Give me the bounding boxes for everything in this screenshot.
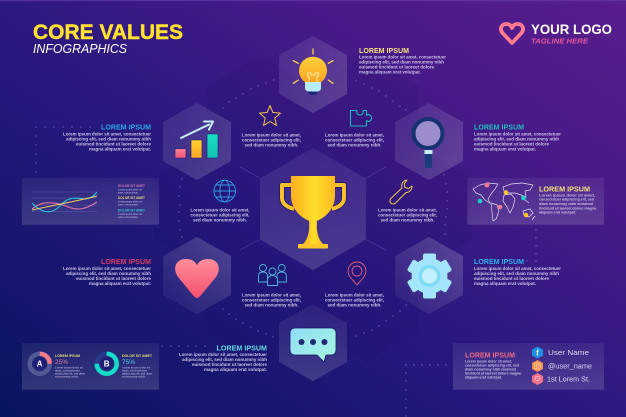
panel: line chart: amet, consectetuer [118,190,138,194]
feature: puzzle: sed diam nonummy nibh. [328,143,382,148]
feature: star: consectetuer adipiscing elit, [242,138,301,143]
icon: map pin [348,262,366,285]
icon: star [260,106,280,125]
feature: star: Lorem ipsum dolor sit amet, [242,133,301,138]
feature: location [325,262,384,308]
text block: left upper: Lorem ipsum dolor sit amet, consectetuer [63,132,151,136]
feature: team [242,264,301,308]
panel: world map [467,178,604,225]
panel: line chart: Lorem ipsum dolor sit [118,212,142,216]
text block: left lower [63,259,151,286]
panel: world map: diam nonummy nibh euismod [539,202,593,206]
feature: location: Lorem ipsum dolor sit amet, [325,293,384,298]
panel: line chart: amet, consectetuer [118,202,138,206]
panel: donut charts: adipiscing elit, sed diam [122,372,153,376]
feature: globe: Lorem ipsum dolor sit amet, [190,208,250,212]
panel: trophy hexagon [260,148,366,270]
feature: team: consectetuer adipiscing elit, [242,298,301,303]
text block: right upper: adipiscing elit, sed diam nonummy nibh [474,136,559,142]
panel: donut charts: LOREM IPSUM [55,354,80,358]
feature: globe: consectetuer adipiscing elit, [190,212,250,218]
feature: wrench [378,180,437,222]
text block: top: magna aliquam erat volutpat. [359,70,421,74]
panel: donut charts: Lorem ipsum dolor sit [55,366,83,370]
panel: line chart [22,178,159,225]
panel: donut charts: amet, consectetuer [122,368,147,372]
panel: gear hexagon [395,237,463,314]
panel: donut charts: nonummy nibh. [122,374,146,378]
panel: heart hexagon [163,237,231,314]
panel: line chart: DOLOR SIT AMET [118,184,145,188]
feature: puzzle: consectetuer adipiscing elit, [325,138,384,143]
icon: light bulb [293,49,333,95]
text block: right upper: Lorem ipsum dolor sit amet, consectetuer [474,132,561,136]
panel: donut charts: 25% [55,359,68,366]
icon: location [532,373,543,385]
title [33,21,183,56]
panel: contact: tincidunt ut laoreet dolore magna [465,372,521,376]
panel: contact: LOREM IPSUM [465,352,515,360]
panel: world map: tincidunt ut laoreet dolore magna [539,206,596,210]
panel: world map: Lorem ipsum dolor sit amet, [539,194,595,198]
feature: wrench: sed diam nonummy nibh. [380,218,434,222]
text block: top [359,48,446,74]
panel: magnifier hexagon [395,103,463,180]
text block: left upper: euismod tincidunt ut laoreet dolore [76,142,151,146]
text block: right lower: LOREM IPSUM [474,259,524,266]
panel: bulb hexagon [279,36,347,113]
title: CORE VALUES [33,21,183,44]
panel: line chart: Lorem ipsum dolor sit [118,200,142,204]
feature: puzzle [325,110,384,148]
icon: logo heart [501,24,523,43]
text block: left upper: adipiscing elit, sed diam nonummy nibh [66,136,151,142]
feature: puzzle: Lorem ipsum dolor sit amet, [325,133,384,138]
icon: wrench [390,180,412,204]
text block: bottom: euismod tincidunt ut laoreet dolore [192,362,267,367]
panel: donut charts [22,343,159,390]
feature: wrench: Lorem ipsum dolor sit amet, [378,208,437,212]
text block: left upper: magna aliquam erat volutpat. [89,146,151,152]
icon: chat bubble [290,328,336,362]
logo: TAGLINE HERE [531,36,589,46]
text block: bottom: adipiscing elit, sed diam nonummy nibh [182,357,267,362]
text block: top: euismod tincidunt ut laoreet dolore [359,64,434,70]
text block: bottom: LOREM IPSUM [216,345,267,352]
panel: world map: consectetuer adipiscing elit, sed [539,198,594,202]
icon: heart [175,259,219,298]
logo: YOUR LOGO [531,21,612,37]
feature: star: sed diam nonummy nibh. [244,143,298,148]
icon: bar chart with arrow [175,122,218,158]
text block: left upper: LOREM IPSUM [101,125,151,132]
chart: donut B 75%: B [104,360,110,368]
panel: donut charts: amet, consectetuer [55,368,80,372]
text block: right upper: euismod tincidunt ut laoreet dolore [474,142,549,146]
icon: world map outline [473,183,535,221]
honeycomb backing cells [154,56,472,362]
icon: gear [407,254,452,298]
panel: contact: 1st Lorem St. [547,374,590,384]
panel: chat hexagon [279,304,347,381]
text block: right upper [474,125,561,152]
text block: bottom: magna aliquam erat volutpat. [204,367,267,372]
text block: right upper: magna aliquam erat volutpat. [474,146,536,152]
text block: right lower: Lorem ipsum dolor sit amet, consectetuer [474,266,561,271]
text block: right lower: magna aliquam erat volutpat. [474,281,536,286]
feature: wrench: consectetuer adipiscing elit, [378,212,437,218]
panel: line chart: amet, consectetuer [118,215,138,219]
text block: bottom [179,345,267,372]
panel: world map: LOREM IPSUM [539,186,590,194]
icon: instagram [532,360,543,372]
panel: line chart: DOLOR SIT AMET [118,208,145,212]
text block: top: Lorem ipsum dolor sit amet, consectetuer [359,54,446,60]
feature: globe: sed diam nonummy nibh. [193,218,247,222]
icon: globe [214,180,236,202]
feature: team: sed diam nonummy nibh. [244,303,298,308]
icon: facebook [532,346,543,358]
feature: team: Lorem ipsum dolor sit amet, [242,293,301,298]
panel: donut charts: adipiscing elit, sed diam [55,372,86,376]
text block: bottom: Lorem ipsum dolor sit amet, consectetuer [179,352,267,357]
feature: globe [190,180,250,222]
text block: top: LOREM IPSUM [359,48,409,55]
panel: contact: Lorem ipsum dolor sit amet, [465,360,512,364]
icon: facebook: f [536,348,539,358]
dotted connectors [35,79,537,417]
panel: contact: User Name [548,348,589,357]
text block: right lower [474,259,561,286]
panel: world map: aliquam erat volutpat. [539,210,576,214]
text block: left lower: magna aliquam erat volutpat. [89,281,151,286]
feature: location: sed diam nonummy nibh. [328,303,382,308]
text block: right lower: euismod tincidunt ut laoreet dolore [474,276,549,281]
text block: left lower: LOREM IPSUM [101,259,151,266]
panel: chart hexagon [163,103,231,180]
panel: contact: diam nonummy nibh euismod [465,368,516,372]
panel: contact [453,343,604,390]
logo [501,21,612,46]
text block: left lower: Lorem ipsum dolor sit amet, consectetuer [63,266,151,271]
panel: donut charts: nonummy nibh. [55,374,79,378]
text block: left lower: euismod tincidunt ut laoreet dolore [76,276,151,281]
feature: location: consectetuer adipiscing elit, [325,298,384,303]
text block: left lower: adipiscing elit, sed diam nonummy nibh [66,271,151,276]
icon: trophy [282,176,344,248]
icon: people [258,264,286,286]
panel: donut charts: Lorem ipsum dolor sit [122,366,150,370]
panel: line chart: DOLOR SIT AMET [118,196,145,200]
panel: contact: @user_name [548,362,592,370]
icon: puzzle piece [350,110,372,126]
panel: contact: consectetuer adipiscing elit, sed [465,364,519,368]
text block: right lower: adipiscing elit, sed diam nonummy nibh [474,271,559,276]
panel: donut charts: DOLOR SIT AMET [122,354,152,358]
text block: right upper: LOREM IPSUM [474,125,524,132]
panel: line chart: Lorem ipsum dolor sit [118,188,142,192]
feature: star [242,106,301,148]
icon: magnifier [414,119,442,168]
text block: left upper [63,125,151,152]
panel: contact: aliquam erat volutpat. [465,376,502,380]
panel: donut charts: 75% [122,359,135,366]
text block: top: adipiscing elit, sed diam nonummy nibh [359,60,444,64]
title: INFOGRAPHICS [33,41,127,56]
chart: donut A 25%: A [37,360,43,368]
